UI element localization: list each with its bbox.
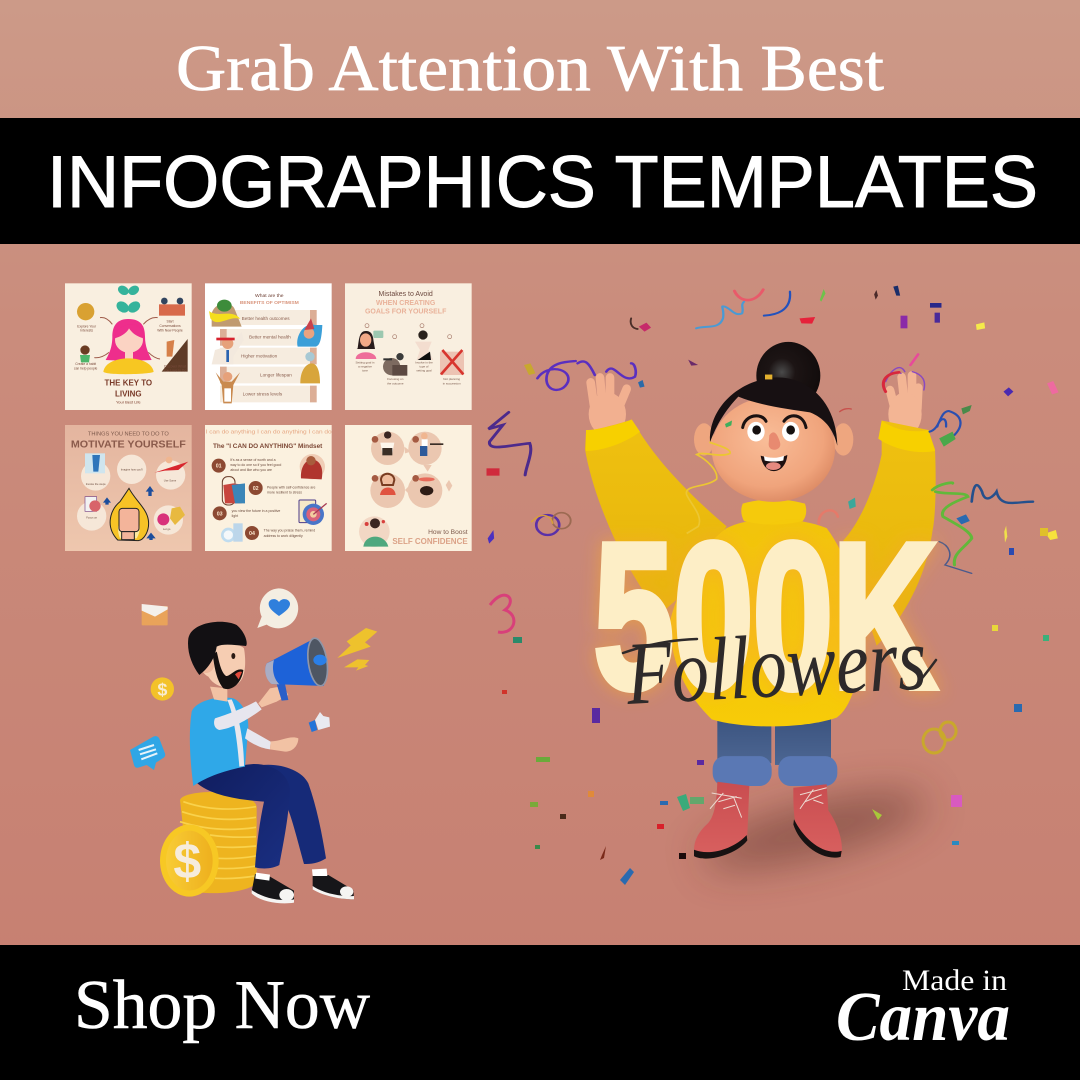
thumbnail: i can do anything mindset [205, 425, 332, 551]
thumbnail: benefits of optimism [205, 283, 332, 410]
thumbnail: mistakes to avoid: a negative [358, 364, 372, 368]
thumbnail: motivate yourself: Imagine how you'll [121, 468, 143, 472]
icon: lightning bolts [337, 628, 377, 671]
thumbnail: mistakes to avoid: tone [362, 368, 368, 372]
thumbnail: mistakes to avoid: the outcome [387, 381, 404, 385]
thumbnail: motivate yourself: Let go [163, 527, 171, 531]
head [686, 342, 853, 533]
nose [769, 432, 780, 450]
template thumbnails, row 1 [65, 283, 472, 410]
big dollar coin: $ [173, 833, 201, 889]
confetti and streamers, upper [487, 286, 1059, 573]
icon: dollar coin [151, 677, 174, 701]
button text: Shop Now: Shop Now [74, 967, 370, 1044]
thumbnail: mistakes to avoid: WHEN CREATING [376, 300, 435, 307]
hair bun [756, 342, 820, 409]
floor shadow under woman [697, 777, 933, 883]
thumbnail: benefits of optimism: Better mental health [249, 335, 291, 340]
thumbnail: i can do anything mindset: 03 [217, 511, 223, 517]
thumbnail: the key to living: Explore Your [77, 325, 97, 329]
icon: envelope [142, 604, 168, 625]
thumbnail: motivate yourself: MOTIVATE YOURSELF [71, 439, 186, 450]
thumbnail: mistakes to avoid: setting goal [416, 368, 432, 372]
card heading: How to Boost [428, 529, 468, 536]
thumbnail: the key to living: Create a habit [75, 362, 96, 366]
title banner [0, 118, 1080, 244]
thumbnail: i can do anything mindset: I can do anything I can do anything I can do [206, 429, 332, 435]
legs [713, 719, 837, 786]
thumbnail: the key to living: With New People [157, 329, 183, 333]
title: Infographics Templates: INFOGRAPHICS TEMPLATES [47, 142, 1038, 223]
thumbnail: mistakes to avoid: Not planning [443, 377, 460, 381]
thumbnail: mistakes to avoid: Setting goal in [356, 360, 375, 364]
thumbnail: benefits of optimism: Lower stress levels [243, 392, 283, 397]
illustration: woman celebrating [585, 342, 936, 859]
thumbnail: the key to living: Conversations [159, 324, 181, 328]
card heading: The "I CAN DO ANYTHING" Mindset [213, 443, 323, 450]
card heading: What are the [255, 293, 284, 299]
sweater body [670, 499, 862, 726]
thumbnail: mistakes to avoid: GOALS FOR YOURSELF [365, 309, 447, 316]
thumbnail: motivate yourself [65, 425, 192, 551]
boots [694, 782, 842, 859]
thumbnail: boost self confidence: SELF CONFIDENCE [392, 536, 468, 546]
thumbnail: boost self confidence [345, 425, 472, 551]
thumbnail: i can do anything mindset: address to work diligently [264, 534, 303, 538]
500K numeral: 500K [594, 501, 936, 731]
left hand [591, 378, 627, 409]
icon: heart speech bubble [257, 588, 298, 628]
thumbnail: the key to living: can help people [74, 366, 98, 370]
thumbnail: mistakes to avoid: in succession [443, 381, 461, 385]
illustration: man with megaphone on coins [130, 588, 377, 903]
thumbnail: mistakes to avoid: type of [420, 364, 429, 368]
thumbnail: i can do anything mindset: light [232, 514, 238, 518]
thumbnail: i can do anything mindset: 04 [249, 531, 255, 537]
thumbnail: the key to living [65, 283, 192, 410]
thumbnail: mistakes to avoid [345, 283, 472, 410]
footer bar [0, 945, 1080, 1080]
Made in Canva badge: Made in [902, 964, 1007, 997]
thumbnail: i can do anything mindset: People with self-confidence are [267, 486, 315, 490]
heading: Grab Attention With Best: Grab Attention With Best [176, 32, 884, 105]
500K glow: 500K [594, 501, 936, 731]
icon: chat bubble [130, 736, 165, 770]
thumbnail: i can do anything mindset: you view the future in a positive [232, 509, 280, 513]
mouth [761, 455, 787, 471]
thumbnail: i can do anything mindset: 01 [216, 464, 222, 470]
man figure [188, 622, 354, 903]
thumbnail: the key to living: LIVING [115, 390, 142, 399]
card heading: THINGS YOU NEED TO DO TO [88, 431, 169, 437]
thumbnail: benefits of optimism: Longer lifespan [260, 373, 292, 378]
thumbnail: motivate yourself: Use Some [164, 479, 177, 483]
icon: dollar coin: $ [157, 680, 167, 700]
eyes [743, 416, 806, 442]
thumbnail: the key to living: Discover What [164, 364, 186, 368]
thumbnail: i can do anything mindset: The way you praise them, remind [264, 529, 315, 533]
thumbnail: i can do anything mindset: It's as a sense of worth and a [230, 458, 276, 462]
thumbnail: benefits of optimism: Higher motivation [241, 354, 278, 359]
right hand [890, 376, 918, 409]
icon: thumbs up [309, 712, 330, 732]
thumbnail: i can do anything mindset: 02 [253, 486, 259, 492]
thumbnail: motivate yourself: Involve the steps [86, 482, 106, 486]
thumbnail: i can do anything mindset: more resilient to stress [267, 491, 302, 495]
arms and hands [585, 376, 936, 646]
thumbnail: benefits of optimism: BENEFITS OF OPTIMISM [240, 300, 299, 306]
hair [710, 377, 837, 446]
thumbnail: mistakes to avoid: Involve in the [415, 360, 433, 364]
thumbnail: the key to living: Start [166, 319, 174, 323]
thumbnail: the key to living: Your Best Life [116, 399, 141, 404]
template thumbnails, row 2 [65, 425, 472, 551]
confetti, lower [490, 528, 1049, 885]
thumbnail: i can do anything mindset: way to do one so if you feel good [230, 463, 281, 467]
Made in Canva badge: Canva [836, 979, 1010, 1056]
card heading: Mistakes to Avoid [379, 291, 433, 298]
thumbnail: the key to living: You Love to Do [164, 369, 186, 373]
thumbnail: motivate yourself: Focus on [86, 515, 98, 519]
megaphone [265, 637, 330, 701]
card heading: THE KEY TO [105, 379, 152, 388]
thumbnail: benefits of optimism: Better health outcomes [242, 316, 290, 321]
Followers script: Followers [623, 609, 929, 724]
coin stack [160, 792, 257, 897]
thumbnail: the key to living: Interests [80, 329, 93, 333]
streamer on face [686, 442, 730, 533]
thumbnail: i can do anything mindset: about and like who you are [230, 468, 272, 472]
thumbnail: mistakes to avoid: Focusing on [387, 377, 404, 381]
